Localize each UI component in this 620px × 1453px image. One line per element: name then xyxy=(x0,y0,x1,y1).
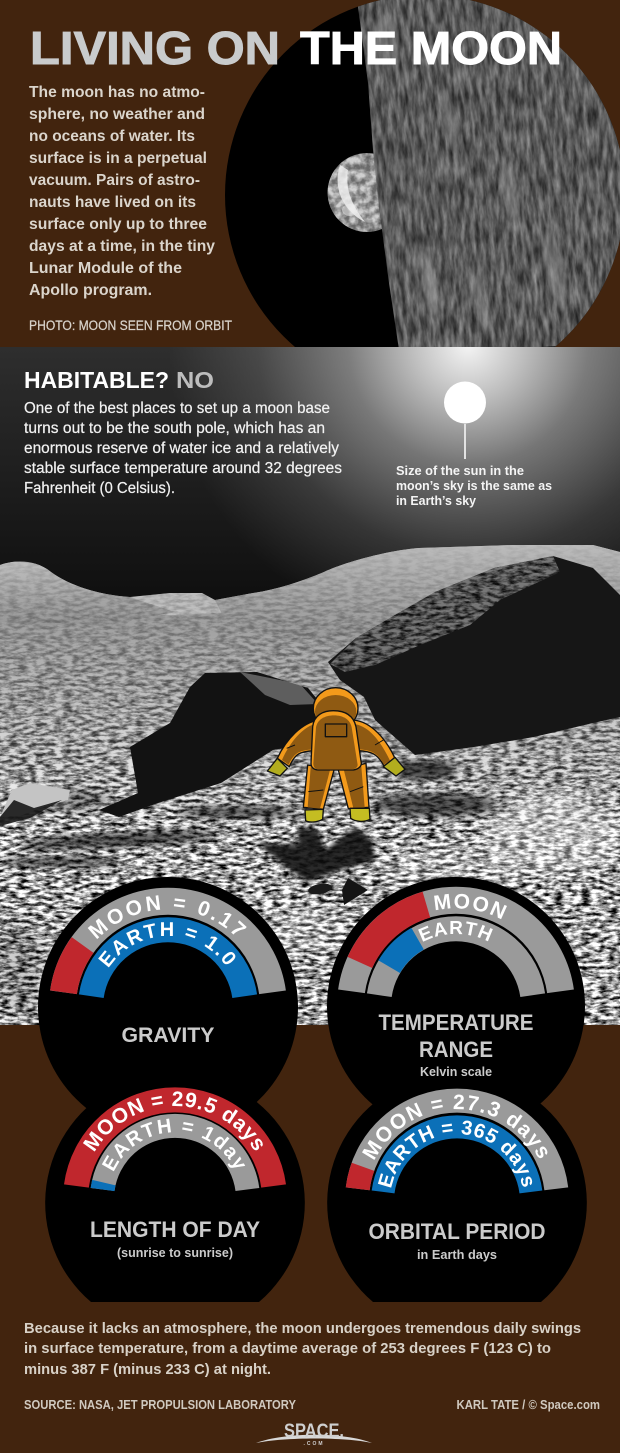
foreground streaks and patches xyxy=(0,760,620,1020)
panel: bottom brown band xyxy=(0,1025,620,1453)
text block: south pole xyxy=(24,400,342,497)
panel: temperature range gauge: MOON xyxy=(434,894,507,919)
heading: habitable: HABITABLE? xyxy=(24,367,169,393)
title second part: THE MOON xyxy=(300,22,562,74)
intro text block: days at a time, in the tiny xyxy=(29,238,215,255)
panel: gravity gauge: EARTH = 1.0 xyxy=(98,922,236,968)
panel: orbital period gauge xyxy=(327,1088,587,1302)
panel: gravity gauge: MOON = 0.17 xyxy=(88,895,247,939)
heading: habitable: NO xyxy=(176,367,214,393)
title: LIVING ON xyxy=(30,22,280,74)
panel: temperature range gauge: TEMPERATURE xyxy=(378,1010,534,1035)
foreground boulder xyxy=(342,878,368,905)
callout: sun size xyxy=(396,463,552,508)
panel: length of day gauge: (sunrise to sunrise) xyxy=(117,1245,233,1260)
panel: temperature range gauge: RANGE xyxy=(419,1037,493,1062)
intro text block: surface is in a perpetual xyxy=(29,150,207,167)
panel: orbital period gauge: MOON = 27.3 days xyxy=(362,1094,548,1160)
panel: orbital period gauge: EARTH = 365 days xyxy=(378,1120,532,1188)
callout: sun size: Size of the sun in the xyxy=(396,463,524,478)
callout: sun size: in Earth’s sky xyxy=(396,493,477,508)
photo: moon seen from orbit with Earth rising xyxy=(225,0,620,347)
panel: length of day gauge xyxy=(45,1087,305,1302)
panel: gravity gauge xyxy=(38,877,298,1108)
callout: sun size: moon’s sky is the same as xyxy=(396,478,552,493)
intro text block: The moon has no atmo- xyxy=(29,84,205,101)
left boulder shadow xyxy=(0,800,62,826)
text block: south pole: One of the best places to set up a moon base xyxy=(24,400,330,417)
panel: orbital period gauge: in Earth days xyxy=(417,1247,497,1262)
left dark rock xyxy=(99,672,330,817)
logo: Space.com: SPACE. xyxy=(284,1421,344,1442)
panel: length of day gauge: EARTH = 1day xyxy=(102,1118,246,1172)
icon: astronaut xyxy=(267,688,405,822)
text block: south pole: stable surface temperature around 32 degrees xyxy=(24,460,342,477)
icon: Earth xyxy=(328,153,382,232)
right dark rock xyxy=(328,556,620,755)
dark pebble xyxy=(307,882,333,896)
intro text block: vacuum. Pairs of astro- xyxy=(29,172,200,189)
intro text block: no oceans of water. Its xyxy=(29,128,195,145)
text block: daily swings xyxy=(24,1320,581,1378)
source credit: SOURCE: NASA, JET PROPULSION LABORATORY xyxy=(24,1398,297,1412)
icon: sun with leader line xyxy=(444,382,486,459)
intro text block: Apollo program. xyxy=(29,282,152,299)
logo: Space.com: .COM xyxy=(303,1441,325,1447)
text block: south pole: enormous reserve of water ice and a relatively xyxy=(24,440,339,457)
astronaut shadow xyxy=(257,827,375,882)
sky xyxy=(0,347,620,617)
intro text block: Lunar Module of the xyxy=(29,260,182,277)
intro text block: nauts have lived on its xyxy=(29,194,196,211)
text block: south pole: turns out to be the south pole, which has an xyxy=(24,420,325,437)
panel: lunar landscape photo xyxy=(0,347,620,1027)
logo: Space.com xyxy=(256,1421,372,1447)
lunar ground xyxy=(0,540,620,1027)
moon surface limb xyxy=(341,0,620,357)
panel: length of day gauge: LENGTH OF DAY xyxy=(90,1217,260,1242)
panel: temperature range gauge: EARTH xyxy=(418,921,493,942)
intro text block xyxy=(29,84,215,299)
text block: daily swings: minus 387 F (minus 233 C) at night. xyxy=(24,1361,271,1378)
intro text block: sphere, no weather and xyxy=(29,106,205,123)
small left boulder xyxy=(0,783,70,817)
panel: length of day gauge: MOON = 29.5 days xyxy=(83,1091,263,1152)
panel: temperature range gauge: Kelvin scale xyxy=(420,1064,492,1079)
panel: temperature range gauge xyxy=(327,877,585,1104)
sunlit rock texture xyxy=(330,556,560,672)
rock highlights xyxy=(240,672,318,705)
panel: gravity gauge: GRAVITY xyxy=(122,1024,214,1047)
photo caption: PHOTO: MOON SEEN FROM ORBIT xyxy=(29,318,232,333)
panel: orbital period gauge: ORBITAL PERIOD xyxy=(368,1219,546,1244)
text block: south pole: Fahrenheit (0 Celsius). xyxy=(24,480,175,497)
intro text block: surface only up to three xyxy=(29,216,207,233)
text block: daily swings: Because it lacks an atmosphere, the moon undergoes tremendous daily swings xyxy=(24,1320,581,1337)
text block: daily swings: in surface temperature, from a daytime average of 253 degrees F (123 C) to xyxy=(24,1340,551,1357)
author credit: KARL TATE / © Space.com xyxy=(456,1398,600,1412)
